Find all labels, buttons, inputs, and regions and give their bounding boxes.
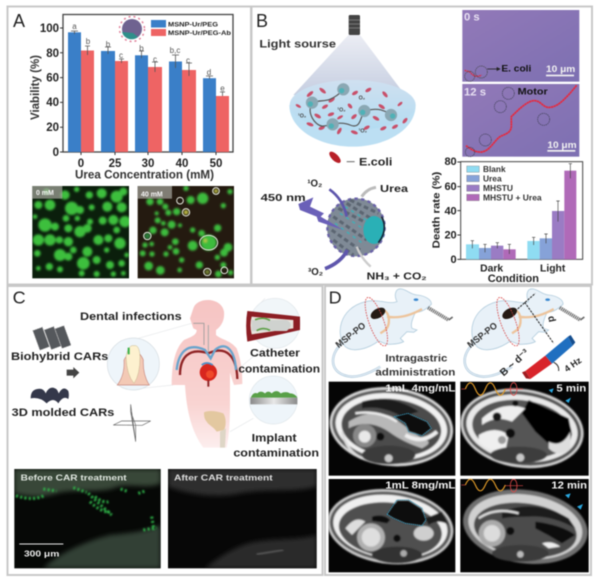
label implant contamination: Implant <box>252 433 297 445</box>
bar chart: viability vs urea concentration: b <box>86 37 91 46</box>
legend: MSNP-Ur/PEG-Ab <box>168 30 231 37</box>
human body illustration <box>172 300 242 448</box>
bar chart: viability vs urea concentration: 40 <box>46 97 59 109</box>
MRI scan: 12 min <box>458 479 592 572</box>
heading C: C <box>13 288 26 308</box>
label field equation: 4 Hz <box>562 355 584 374</box>
bar chart: viability vs urea concentration: 20 <box>46 122 59 134</box>
MRI scan: 1 mL 4 mg/mL <box>326 381 457 476</box>
bar chart: viability vs urea concentration: 50 <box>210 158 222 170</box>
waveform and coil <box>461 479 523 492</box>
label catheter contamination: contamination <box>238 363 320 375</box>
icon: implant circle <box>249 376 297 424</box>
mouse illustration left: MSP-PO <box>334 320 367 350</box>
label intragastric administration: administration <box>375 368 455 379</box>
icon: nanoparticle <box>120 16 144 42</box>
MRI scan: 1 mL 8 mg/mL <box>323 479 457 572</box>
waveform and coil <box>461 383 523 395</box>
micrograph: 0 mM <box>32 186 131 278</box>
bar chart: viability vs urea concentration: b <box>139 44 144 53</box>
reaction labels: 450 nm <box>261 193 306 204</box>
micrograph: 40 mM <box>138 186 234 278</box>
reaction labels: ¹O₂ <box>307 179 322 190</box>
mouse illustration right <box>465 289 584 377</box>
label 0 mM: 0 mM <box>36 190 54 197</box>
icon: bar magnet <box>522 335 575 379</box>
bar chart: death rate: 60 <box>444 181 457 193</box>
bar chart: viability vs urea concentration: c <box>153 55 157 64</box>
heading D: D <box>329 287 342 307</box>
label intragastric administration: Intragastric <box>385 354 448 365</box>
MRI scan: 1 mL 8 mg/mL: 1mL 8mg/mL <box>385 480 455 491</box>
MRI scan: 1 mL 4 mg/mL: 1mL 4mg/mL <box>385 384 455 395</box>
bar chart: death rate <box>431 156 583 285</box>
bar chart: viability vs urea concentration: 25 <box>109 158 122 170</box>
micrograph: 0 s: E. coli <box>501 64 531 74</box>
rings marking dead cells <box>144 188 228 276</box>
bar chart: death rate: MHSTU <box>483 183 513 193</box>
bar chart: viability vs urea concentration: b,c <box>170 46 180 55</box>
bar chart: viability vs urea concentration: a <box>72 22 77 31</box>
label implant contamination <box>233 433 319 460</box>
micrograph: 0 s: 10 μm <box>546 64 575 74</box>
bar chart: death rate: Death rate (%) <box>431 172 442 248</box>
bar chart: viability vs urea concentration: Urea Concentration (mM) <box>75 170 214 182</box>
label catheter contamination: Catheter <box>250 348 301 360</box>
bar chart: viability vs urea concentration: 40 <box>176 158 188 170</box>
MRI scan: 5 min: 5 min <box>556 384 586 395</box>
label intragastric administration <box>375 354 455 379</box>
bar chart: viability vs urea concentration: 80 <box>46 48 59 60</box>
label field equation: B ~ d⁻³ <box>498 347 532 379</box>
bar chart: death rate: 80 <box>444 156 457 168</box>
petri dish with bacteria and motors: ¹O₂ <box>337 108 346 114</box>
arrows and bolt <box>298 197 343 230</box>
nanoparticle reaction diagram <box>261 179 427 282</box>
mouse illustration left <box>333 289 453 377</box>
bar chart: viability vs urea concentration: 60 <box>46 72 59 84</box>
arrows blue <box>549 388 571 403</box>
label biohybrid CARs: Biohybrid CARs <box>11 351 108 363</box>
label catheter contamination <box>238 348 320 375</box>
icon: E. coli: E.coli <box>359 157 392 169</box>
icon: tooth in circle <box>107 338 159 390</box>
micrograph: 0 s: 0 s <box>464 12 480 24</box>
panel B: light-driven motor and death rate <box>252 6 592 285</box>
bar chart: viability vs urea concentration: e <box>220 84 225 93</box>
micrograph: before CAR treatment: Before CAR treatment <box>21 473 127 483</box>
micrograph: after CAR treatment <box>168 469 317 568</box>
heading A: A <box>13 11 25 31</box>
bar chart: death rate: 40 <box>444 205 457 217</box>
label implant contamination: contamination <box>233 448 319 460</box>
legend <box>151 20 231 37</box>
bar chart: viability vs urea concentration: 100 <box>40 23 59 35</box>
petri dish with bacteria and motors: O₂ <box>359 95 366 101</box>
heading B: B <box>256 11 268 31</box>
legend: MSNP-Ur/PEG <box>168 22 218 28</box>
label 3D molded CARs: 3D molded CARs <box>12 407 114 419</box>
label light source: Light sourse <box>259 38 336 50</box>
label field equation <box>498 347 584 379</box>
bar chart: death rate: Urea <box>483 173 502 183</box>
micrograph: 0 s <box>462 10 579 82</box>
micrograph: 12 s: 12 s <box>464 86 486 98</box>
bar chart: viability vs urea concentration: c <box>119 51 123 60</box>
micrograph: after CAR treatment: After CAR treatment <box>174 473 273 483</box>
bar chart: viability vs urea concentration: 30 <box>142 158 154 170</box>
bar chart: death rate: MHSTU + Urea <box>483 192 542 202</box>
label dental infections: Dental infections <box>80 311 182 323</box>
bar chart: death rate: Blank <box>483 164 506 174</box>
icon: catheter circle <box>246 298 300 348</box>
bar chart: death rate: 0 <box>451 254 457 266</box>
MRI scan: 12 min: 12 min <box>551 480 587 491</box>
bar chart: death rate: Dark <box>480 264 503 275</box>
bar chart: viability vs urea concentration: Viability (%) <box>30 55 42 120</box>
icon: 3D molded CARs <box>31 388 69 403</box>
micrograph: before CAR treatment <box>14 469 161 568</box>
panel D: magnetic MRI imaging <box>323 286 592 575</box>
arrows blue <box>565 493 583 510</box>
panel A: viability chart and fluorescence images <box>8 6 251 284</box>
petri dish with bacteria and motors: ¹O₂ <box>298 113 307 119</box>
mouse illustration right: d <box>545 315 557 323</box>
reaction labels: ³O₂ <box>308 267 323 278</box>
bar chart: viability vs urea concentration: b <box>106 40 111 49</box>
petri dish with bacteria and motors <box>289 80 416 147</box>
micrograph: 12 s: Motor <box>518 87 548 97</box>
bar chart: viability vs urea concentration: d <box>207 68 211 77</box>
icon: lamp <box>349 15 360 35</box>
reaction labels: NH₃ + CO₂ <box>367 271 427 282</box>
plane symbol <box>113 404 151 442</box>
bar chart: viability vs urea concentration: c <box>186 56 190 65</box>
panel C: dental infections and CAR treatment <box>8 286 322 575</box>
label 40 mM: 40 mM <box>141 191 163 198</box>
reaction labels <box>261 179 427 282</box>
petri dish with bacteria and motors: ¹O₂ <box>359 129 368 135</box>
micrograph: 12 s <box>462 84 579 157</box>
bar chart: death rate: Condition <box>488 273 539 285</box>
bar chart: viability vs urea concentration: 0 <box>78 158 84 170</box>
bar chart: viability vs urea concentration: 0 <box>53 147 59 159</box>
zoom cone lines <box>138 298 265 432</box>
MRI scan: 5 min <box>455 381 589 476</box>
arrow <box>67 367 79 378</box>
bar chart: death rate: 20 <box>444 230 457 242</box>
icon: E. coli <box>327 150 392 169</box>
micrograph: 12 s: 10 μm <box>547 140 577 150</box>
reaction labels: Urea <box>380 184 409 195</box>
light cone <box>293 35 405 95</box>
bar chart: death rate: Light <box>540 264 566 275</box>
icon: biohybrid CARs <box>33 326 71 350</box>
micrograph: before CAR treatment: 300 μm <box>24 549 59 559</box>
bar chart: viability vs urea concentration <box>30 14 233 182</box>
mouse illustration right: MSP-PO <box>465 320 499 350</box>
light source and dish illustration <box>259 15 427 282</box>
